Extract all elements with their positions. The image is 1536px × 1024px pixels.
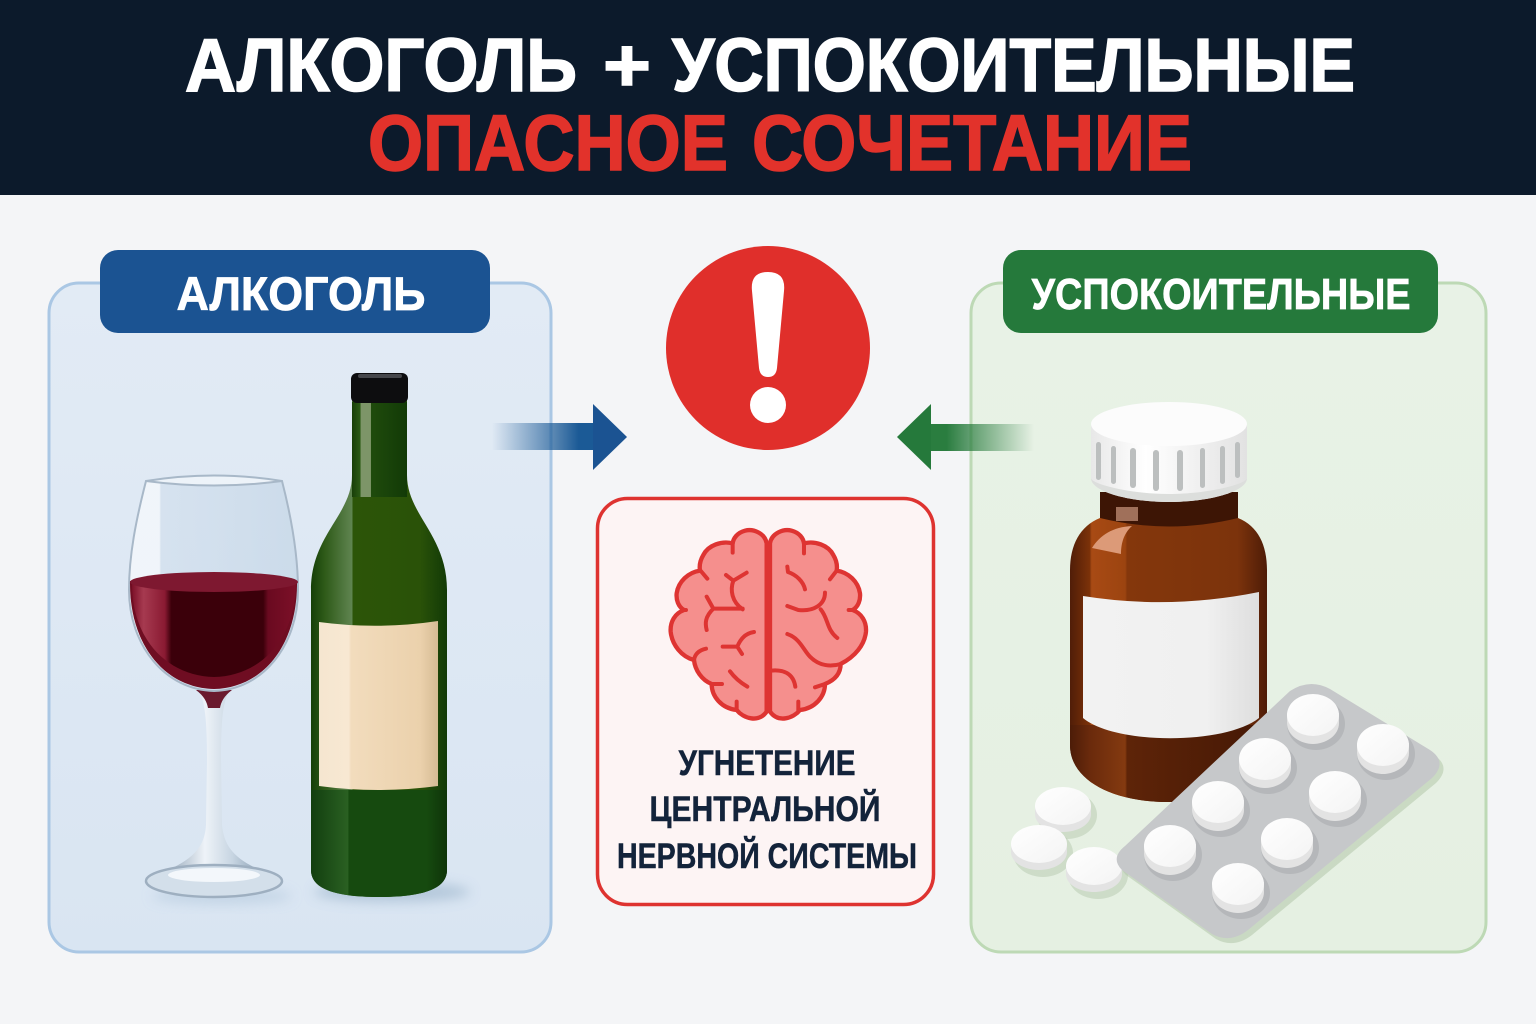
title line 1: АЛКОГОЛЬ xyxy=(185,23,577,107)
title line 2: ОПАСНОЕ xyxy=(368,98,728,187)
icon: blister pack xyxy=(1117,684,1444,943)
badge: alcohol: АЛКОГОЛЬ xyxy=(176,267,426,320)
panel: sedatives xyxy=(971,250,1486,952)
header banner xyxy=(0,0,1536,195)
caption: CNS depression xyxy=(617,744,917,876)
arrow: sedatives to warning xyxy=(897,404,1034,470)
icon: pill bottle xyxy=(1070,402,1267,802)
icon: brain xyxy=(671,530,866,719)
caption: CNS depression: НЕРВНОЙ СИСТЕМЫ xyxy=(617,836,917,876)
badge: alcohol xyxy=(100,250,490,333)
arrow: alcohol to warning xyxy=(492,404,627,470)
title line 2: СОЧЕТАНИЕ xyxy=(752,98,1192,187)
caption: CNS depression: УГНЕТЕНИЕ xyxy=(678,744,856,783)
badge: sedatives xyxy=(1003,250,1438,333)
caption: CNS depression: ЦЕНТРАЛЬНОЙ xyxy=(650,789,880,829)
icon: wine glass xyxy=(129,476,298,904)
bottle cap xyxy=(1091,402,1247,502)
title line 2 xyxy=(368,98,1192,187)
panel: CNS depression xyxy=(598,498,934,904)
icon: warning circle xyxy=(666,246,870,450)
icon: wine bottle xyxy=(311,373,470,902)
title line 1 xyxy=(185,23,1355,107)
title line 1: + xyxy=(603,23,651,107)
icon: loose tablets xyxy=(1011,787,1128,899)
title line 1: УСПОКОИТЕЛЬНЫЕ xyxy=(672,23,1355,107)
panel: alcohol xyxy=(49,250,551,952)
badge: sedatives: УСПОКОИТЕЛЬНЫЕ xyxy=(1032,270,1410,319)
